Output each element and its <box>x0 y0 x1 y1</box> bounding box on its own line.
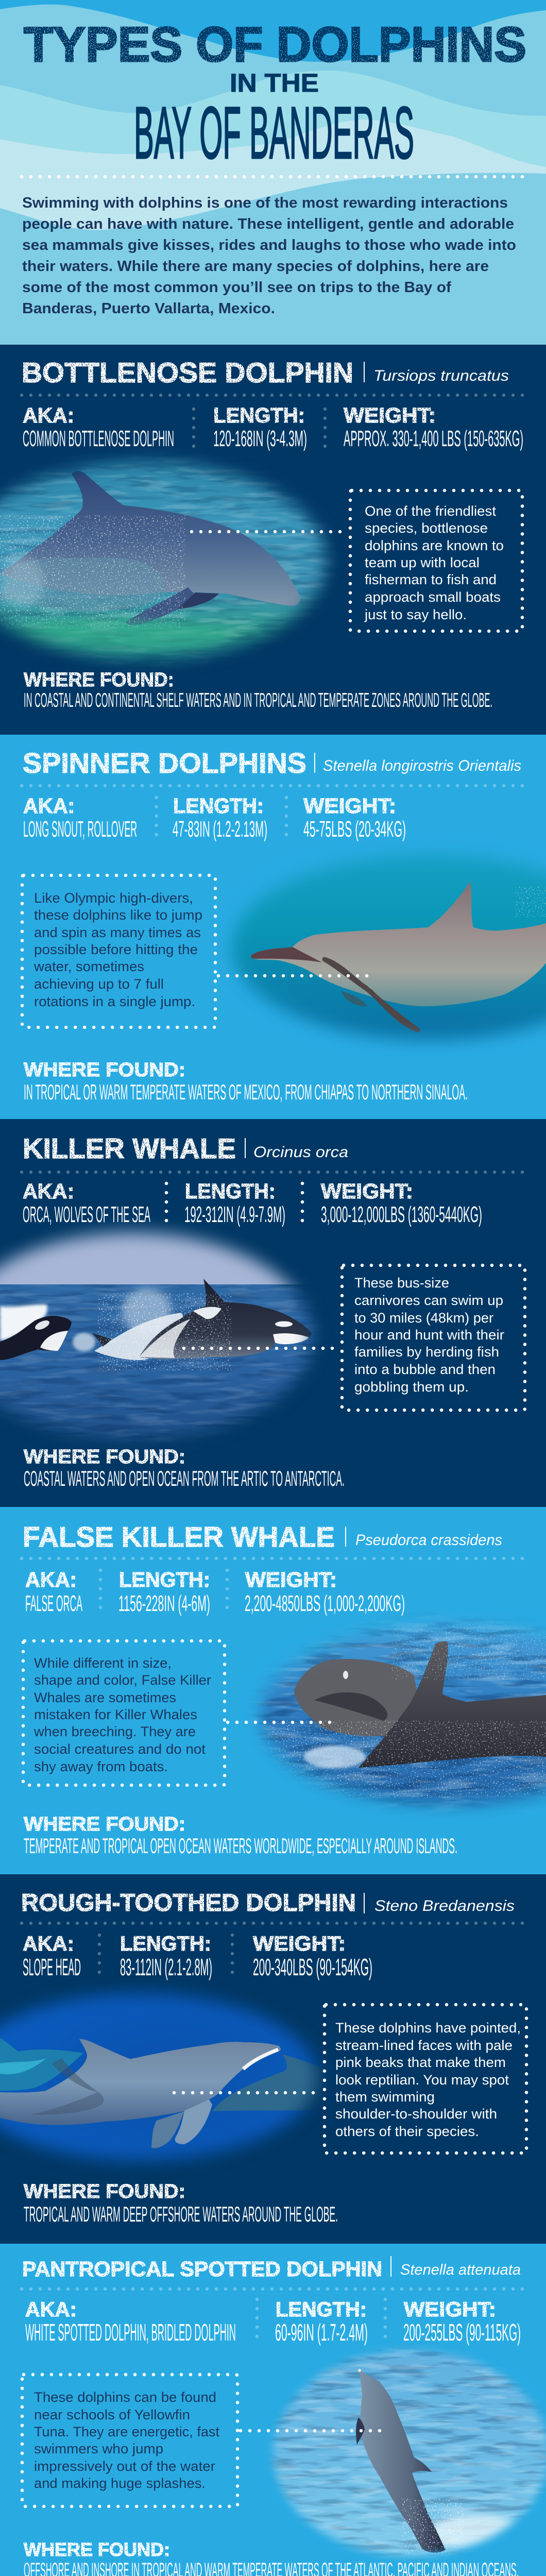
callout: yellowfin tuna: and making huge splashes. <box>34 2476 206 2491</box>
panel: rough-toothed dolphin: 200-340LBS (90-154KG) <box>253 1954 372 1980</box>
latin name: Pseudorca crassidens <box>355 1532 502 1549</box>
facts row <box>25 1568 405 1616</box>
latin name: Steno Bredanensis <box>374 1897 515 1914</box>
facts row: FALSE ORCA <box>25 1591 82 1616</box>
facts row: WEIGHT: <box>344 403 436 427</box>
callout: bus-size carnivores: These bus-size <box>354 1275 449 1291</box>
heading: killer whale: KILLER WHALE <box>23 1132 236 1164</box>
callout: bus-size carnivores: families by herding fish <box>354 1344 499 1360</box>
callout: yellowfin tuna: impressively out of the water <box>34 2459 215 2474</box>
intro text <box>22 195 516 317</box>
facts row: AKA: <box>23 1179 74 1203</box>
callout: reptilian faces: look reptilian. You may spot <box>335 2072 509 2088</box>
facts row: WEIGHT: <box>404 2298 496 2321</box>
photo: spotted dolphin jumping <box>269 2345 546 2561</box>
callout: reptilian faces: them swimming <box>335 2089 435 2105</box>
panel: false killer whale <box>0 1507 546 1874</box>
callout: reptilian faces: stream-lined faces with pale <box>335 2038 513 2053</box>
facts row: LENGTH: <box>119 1568 210 1591</box>
where found <box>24 669 492 711</box>
callout: friendliest species: One of the friendliest <box>365 503 497 519</box>
callout: different in size <box>23 1641 338 1785</box>
panel: spinner dolphins: 45-75LBS (20-34KG) <box>303 817 406 842</box>
facts row <box>25 2298 521 2346</box>
latin name: Stenella attenuata <box>400 2262 521 2278</box>
where found: WHERE FOUND: <box>24 669 174 691</box>
callout: friendliest species: team up with local <box>365 555 480 570</box>
where found <box>24 1814 457 1858</box>
callout: olympic high-divers: rotations in a single jump. <box>34 994 195 1009</box>
facts row: LENGTH: <box>185 1179 276 1203</box>
where found <box>24 1059 468 1104</box>
heading: bottlenose dolphin: BOTTLENOSE DOLPHIN <box>22 357 353 388</box>
facts row: 120-168IN (3-4.3M) <box>213 426 307 451</box>
where found: WHERE FOUND: <box>24 1059 185 1081</box>
facts row: AKA: <box>23 1933 74 1955</box>
facts row: LONG SNOUT, ROLLOVER <box>23 817 137 842</box>
facts row: SLOPE HEAD <box>23 1954 81 1980</box>
facts row <box>23 403 523 451</box>
where found <box>24 1446 345 1490</box>
facts row <box>23 1933 372 1980</box>
panel: spinner dolphins <box>0 735 546 1119</box>
facts row: WEIGHT: <box>253 1933 346 1955</box>
callout: bus-size carnivores: carnivores can swim up <box>354 1293 503 1308</box>
callout: yellowfin tuna: These dolphins can be found <box>34 2389 216 2405</box>
callout: friendliest species <box>192 490 522 631</box>
callout: reptilian faces: pink beaks that make them <box>335 2055 506 2070</box>
callout: different in size: While different in size, <box>34 1655 172 1671</box>
facts row: AKA: <box>25 2298 77 2321</box>
title: types of dolphins: TYPES OF DOLPHINS <box>24 17 526 72</box>
intro text: people can have with nature. These intelligent, gentle and adorable <box>22 216 514 232</box>
callout: olympic high-divers <box>22 875 372 1027</box>
panel: pantropical spotted dolphin <box>0 2244 546 2576</box>
facts row: WEIGHT: <box>321 1179 413 1203</box>
callout: yellowfin tuna: near schools of Yellowfin <box>34 2407 190 2422</box>
callout: olympic high-divers: achieving up to 7 full <box>34 976 164 992</box>
callout: bus-size carnivores: gobbling them up. <box>354 1379 469 1395</box>
facts row: LENGTH: <box>213 403 305 427</box>
callout: friendliest species: dolphins are known to <box>365 538 504 553</box>
callout: bus-size carnivores: hour and hunt with their <box>354 1327 504 1343</box>
callout: different in size: social creatures and do not <box>34 1741 206 1757</box>
callout: friendliest species: just to say hello. <box>364 607 467 622</box>
facts row: COMMON BOTTLENOSE DOLPHIN <box>23 426 174 451</box>
facts row: WEIGHT: <box>303 794 396 818</box>
panel: bottlenose dolphin <box>0 357 524 711</box>
photo: spinner dolphin underwater <box>225 850 546 1049</box>
intro text: some of the most common you’ll see on trips to the Bay of <box>22 279 451 296</box>
panel: killer whale <box>0 1132 526 1490</box>
callout: different in size: when breeching. They are <box>33 1724 196 1739</box>
callout: yellowfin tuna: swimmers who jump <box>34 2441 163 2456</box>
callout: yellowfin tuna <box>22 2375 386 2506</box>
callout: different in size: Whales are sometimes <box>34 1690 176 1705</box>
intro text: Banderas, Puerto Vallarta, Mexico. <box>22 300 275 317</box>
where found: WHERE FOUND: <box>24 2181 185 2202</box>
photo: rough-toothed dolphins underwater <box>0 1984 326 2170</box>
facts row: AKA: <box>25 1568 77 1591</box>
callout: reptilian faces: shoulder-to-shoulder with <box>335 2106 497 2122</box>
facts row: 47-83IN (1.2-2.13M) <box>173 817 267 842</box>
callout: olympic high-divers: Like Olympic high-divers, <box>34 890 193 906</box>
callout: reptilian faces: others of their species. <box>335 2124 479 2139</box>
facts row: ORCA, WOLVES OF THE SEA <box>23 1202 150 1227</box>
where found <box>24 2539 519 2576</box>
latin name: Orcinus orca <box>253 1144 348 1161</box>
callout: bus-size carnivores: into a bubble and then <box>354 1362 496 1377</box>
panel: header with waves <box>0 0 546 345</box>
facts row: 60-96IN (1.7-2.4M) <box>275 2319 368 2346</box>
heading: spinner dolphins: SPINNER DOLPHINS <box>23 747 306 779</box>
intro text: sea mammals give kisses, rides and laughs to those who wade into <box>22 237 516 253</box>
title: in the: IN THE <box>230 69 319 97</box>
heading: false killer whale: FALSE KILLER WHALE <box>23 1521 335 1553</box>
callout: friendliest species: fisherman to fish and <box>365 572 497 587</box>
facts row: WHITE SPOTTED DOLPHIN, BRIDLED DOLPHIN <box>25 2319 236 2346</box>
where found: WHERE FOUND: <box>24 2539 170 2560</box>
facts row: LENGTH: <box>276 2298 367 2321</box>
callout: friendliest species: species, bottlenose <box>365 520 488 536</box>
heading: pantropical spotted dolphin: PANTROPICAL SPOTTED DOLPHIN <box>22 2257 382 2281</box>
where found: WHERE FOUND: <box>24 1446 185 1468</box>
callout: olympic high-divers: these dolphins like to jump <box>34 907 202 923</box>
callout: reptilian faces: These dolphins have pointed, <box>335 2020 521 2036</box>
photo: bottlenose dolphin leaping <box>0 448 350 675</box>
callout: yellowfin tuna: Tuna. They are energetic, fast <box>34 2424 220 2439</box>
callout: olympic high-divers: and spin as many times as <box>34 925 201 940</box>
callout: different in size: shape and color, False Killer <box>34 1672 211 1688</box>
intro text: Swimming with dolphins is one of the most rewarding interactions <box>22 195 508 211</box>
photo: orcas breaching <box>0 1220 321 1445</box>
panel: rough-toothed dolphin <box>0 1889 528 2226</box>
intro text: their waters. While there are many species of dolphins, here are <box>22 258 489 275</box>
facts row: 83-112IN (2.1-2.8M) <box>120 1954 212 1980</box>
facts row: 1156-228IN (4-6M) <box>118 1591 210 1616</box>
facts row <box>23 1179 482 1227</box>
facts row <box>23 794 406 842</box>
callout: bus-size carnivores <box>184 1265 525 1410</box>
latin name: Stenella longirostris Orientalis <box>323 757 521 774</box>
callout: different in size: mistaken for Killer Whales <box>34 1707 197 1722</box>
where found: WHERE FOUND: <box>24 1814 185 1835</box>
latin name: Tursiops truncatus <box>373 367 509 384</box>
facts row: AKA: <box>23 794 75 818</box>
facts row: 192-312IN (4.9-7.9M) <box>184 1202 285 1227</box>
callout: olympic high-divers: possible before hitting the <box>34 942 198 957</box>
where found <box>24 2181 338 2226</box>
facts row: AKA: <box>23 403 74 427</box>
facts row: LENGTH: <box>120 1933 211 1955</box>
heading: rough-toothed dolphin: ROUGH-TOOTHED DOLPHIN <box>21 1889 356 1916</box>
callout: friendliest species: approach small boats <box>365 589 501 605</box>
callout: olympic high-divers: water, sometimes <box>33 959 144 974</box>
callout: different in size: shy away from boats. <box>34 1759 168 1774</box>
facts row: LENGTH: <box>173 794 264 818</box>
callout: bus-size carnivores: to 30 miles (48km) per <box>354 1310 493 1326</box>
callout: reptilian faces <box>174 2005 526 2153</box>
facts row: WEIGHT: <box>245 1568 337 1591</box>
dotted divider <box>22 175 525 178</box>
photo: false killer whale surfacing <box>251 1614 546 1815</box>
